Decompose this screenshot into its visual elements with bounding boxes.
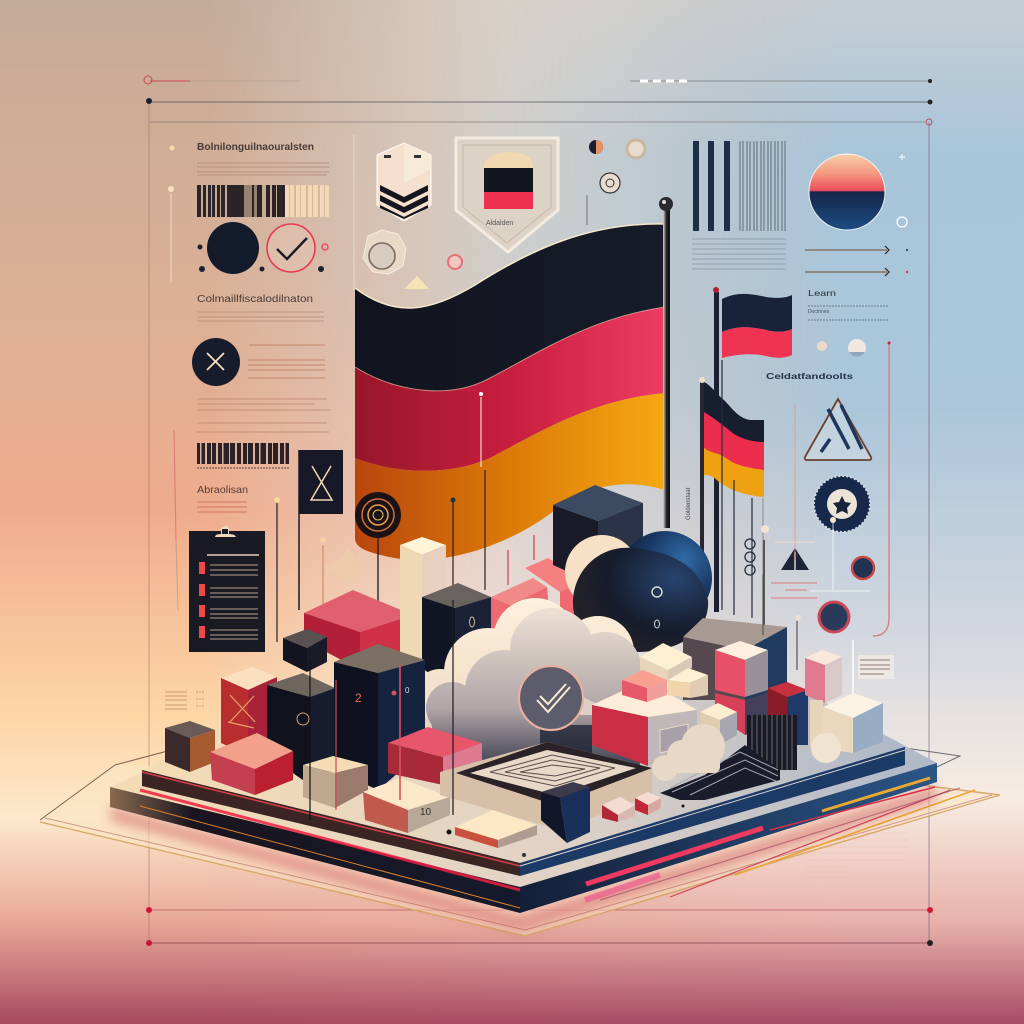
heading: first: Bolnilonguilnaouralsten: [197, 141, 314, 153]
frame lines: [144, 76, 933, 946]
bars: [693, 141, 785, 231]
box: pink tall: [805, 650, 842, 703]
label: learn: [808, 288, 888, 320]
panel: left column texts: [168, 141, 331, 610]
upper slab: [142, 690, 905, 876]
box: pink back: [304, 590, 413, 670]
cloud: large: [414, 598, 641, 775]
label: learn: Learn: [808, 288, 836, 298]
box: check ring: [519, 666, 583, 730]
box: red low: [210, 733, 293, 795]
arrows: [805, 246, 908, 276]
icon: barcode small: [197, 443, 289, 468]
icon: chevron badge: [377, 143, 431, 221]
box: beige: [810, 693, 883, 753]
box: pink cube: [715, 641, 768, 735]
ball: cream small: [811, 733, 841, 763]
box: red x: [221, 667, 277, 755]
box: grey rear: [683, 618, 787, 720]
box: dark mid: [422, 583, 491, 692]
heading: second: Colmaillfiscalodilnaton: [197, 294, 313, 305]
tray: [440, 742, 652, 830]
dotted grid: [770, 833, 908, 878]
icon: shield with flag: Aldalden: [486, 220, 513, 227]
cubes stack: [622, 643, 708, 702]
box: black tower big: 0: [405, 686, 410, 695]
icon: pins: [274, 392, 534, 642]
box: small red cubes: [602, 792, 661, 822]
clipboard: [189, 526, 265, 652]
flagpoles group: [686, 360, 769, 660]
icon: barcode: [197, 185, 329, 217]
box: cream small front: [700, 703, 737, 745]
box: white pink: [592, 685, 697, 766]
icon: warning triangle: [805, 399, 871, 460]
icon: triangle: [404, 276, 429, 289]
box: cream small: [303, 756, 368, 808]
box: pink low: [388, 727, 482, 785]
icon: small warning: [771, 405, 817, 598]
box: navy cube: [541, 782, 590, 843]
slab shadow: [110, 786, 937, 930]
ribbed wave: [660, 745, 780, 800]
box: dark top: [553, 485, 643, 585]
ribbed block: [747, 715, 797, 770]
box: ten: [363, 778, 450, 833]
pins over boxes: [310, 575, 801, 820]
flag pole: [659, 197, 673, 528]
icon: ring medallion: [363, 230, 406, 274]
box: red cube: [768, 682, 808, 745]
box: cream flat: [455, 810, 537, 848]
box: small dark: [283, 629, 327, 672]
icon: dark circle: [198, 222, 328, 274]
heading: third: Abraolisan: [197, 485, 248, 496]
icon: crumpled star: [326, 547, 361, 583]
label: center text: Celdatfandoolts: [766, 371, 853, 381]
big flag: [355, 224, 665, 560]
box: small left: [165, 721, 215, 772]
callout line: [873, 343, 889, 636]
mini note: [853, 640, 894, 710]
icon: spiral emblem: [355, 492, 401, 680]
lower slab: [110, 700, 937, 913]
ball: navy: [618, 531, 712, 625]
small flag lower: [699, 377, 764, 630]
label: learn: Doctrines: [808, 309, 830, 315]
box: ten: 10: [420, 807, 432, 818]
mini list: [165, 692, 204, 709]
icon: x circle: [192, 338, 240, 386]
icon: orbs: [810, 517, 874, 632]
box: black tower small: [267, 673, 335, 785]
icon: check circle: [267, 224, 315, 272]
icon: shield with flag: [456, 138, 558, 252]
scribble lines: [600, 788, 975, 900]
box: black tower big: [334, 644, 425, 790]
box: black tower big: 2: [355, 691, 362, 705]
icon: sphere: [809, 154, 885, 230]
box: pink rear: [491, 558, 585, 650]
platform outline: [40, 745, 1000, 936]
panel: right column graphics: [692, 141, 908, 710]
ball: cream: [565, 535, 639, 609]
small flag upper: [713, 287, 792, 612]
icon: pink seal: [448, 255, 462, 269]
box: cream tall: [400, 537, 446, 660]
flagpoles group: Goldenstaat: [686, 487, 692, 520]
cloud: mini: [652, 724, 725, 781]
icon: top orbs: [587, 140, 645, 225]
icon: round badge: [814, 476, 870, 532]
ball: dark: [573, 548, 708, 652]
boxes back layer: [165, 485, 883, 848]
icon: flag sign X: [299, 450, 343, 610]
